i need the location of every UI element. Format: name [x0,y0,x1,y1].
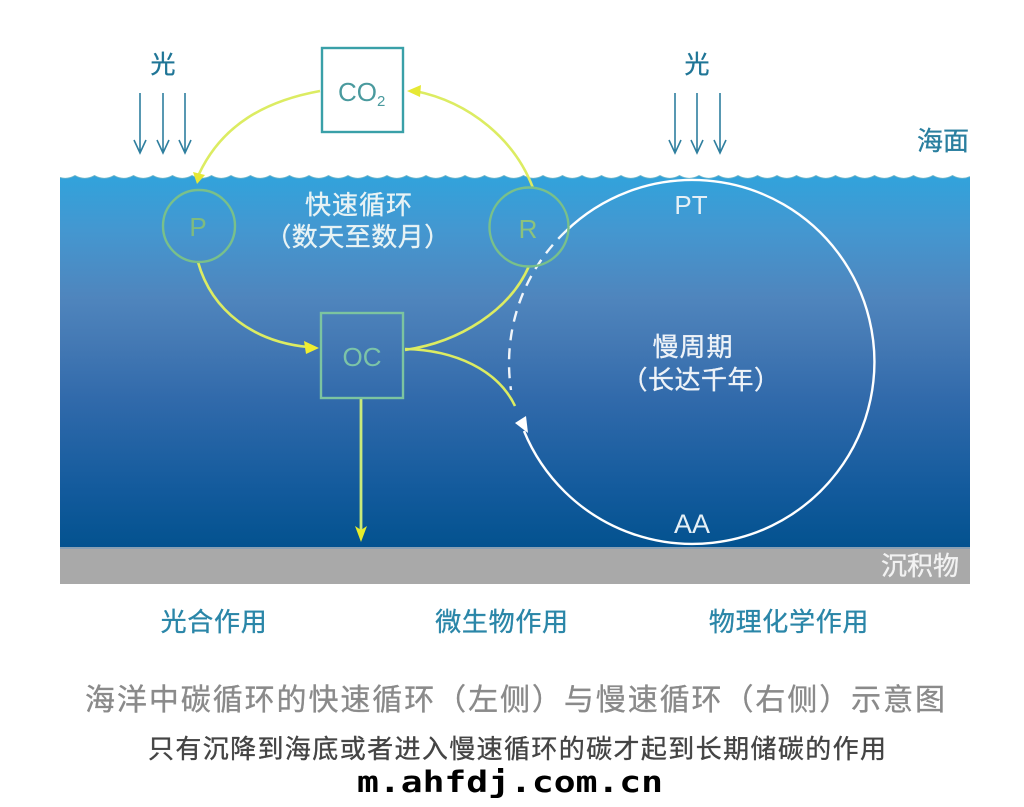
OC box [321,313,403,398]
website url: m.ahfdj.com.cn [357,765,663,799]
arrow: CO2 to P [193,91,320,184]
label: light: 光 [684,51,710,79]
OC label: OC [342,342,382,372]
slow cycle caption [621,332,781,395]
solid arc [524,180,874,544]
process labels: 物理化学作用 [709,607,869,637]
CO2 label: 2 [377,93,385,110]
slow cycle caption: （长达千年） [621,365,781,395]
arrow: P to OC [198,262,319,354]
CO2 box [322,48,403,132]
label: sea surface: 海面 [917,126,969,156]
slow cycle circle [509,180,874,544]
process labels: 微生物作用 [435,607,569,637]
arrowhead [515,416,528,433]
arrow: OC to R [405,266,529,350]
process labels [161,607,869,637]
P label: P [189,212,207,242]
sediment band [60,547,970,584]
arrow: OC to sediment [355,398,367,542]
fast cycle caption: （数天至数月） [265,222,451,252]
P node [163,190,235,262]
arrow: R to CO2 [407,85,533,188]
icon: light arrows [669,93,726,153]
dashed arc [509,231,566,390]
slow cycle caption: 慢周期 [652,332,734,362]
light group right [669,51,726,153]
light group left [134,51,191,153]
icon: light arrows [134,93,191,153]
fast cycle arrows [193,85,533,542]
fast cycle caption [265,190,451,252]
CO2 label: CO [338,77,377,107]
subtitle: 只有沉降到海底或者进入慢速循环的碳才起到长期储碳的作用 [148,734,886,764]
AA label: AA [674,509,710,539]
title: 海洋中碳循环的快速循环（左侧）与慢速循环（右侧）示意图 [85,684,945,717]
label: light: 光 [150,51,176,79]
sediment label: 沉积物 [881,551,959,581]
arrow: OC to slow cycle [405,349,515,406]
PT label: PT [674,190,708,220]
R label: R [519,214,537,244]
process labels: 光合作用 [161,607,267,637]
R node [490,188,568,266]
fast cycle caption: 快速循环 [305,190,413,220]
ocean water with wavy surface [55,176,1024,548]
